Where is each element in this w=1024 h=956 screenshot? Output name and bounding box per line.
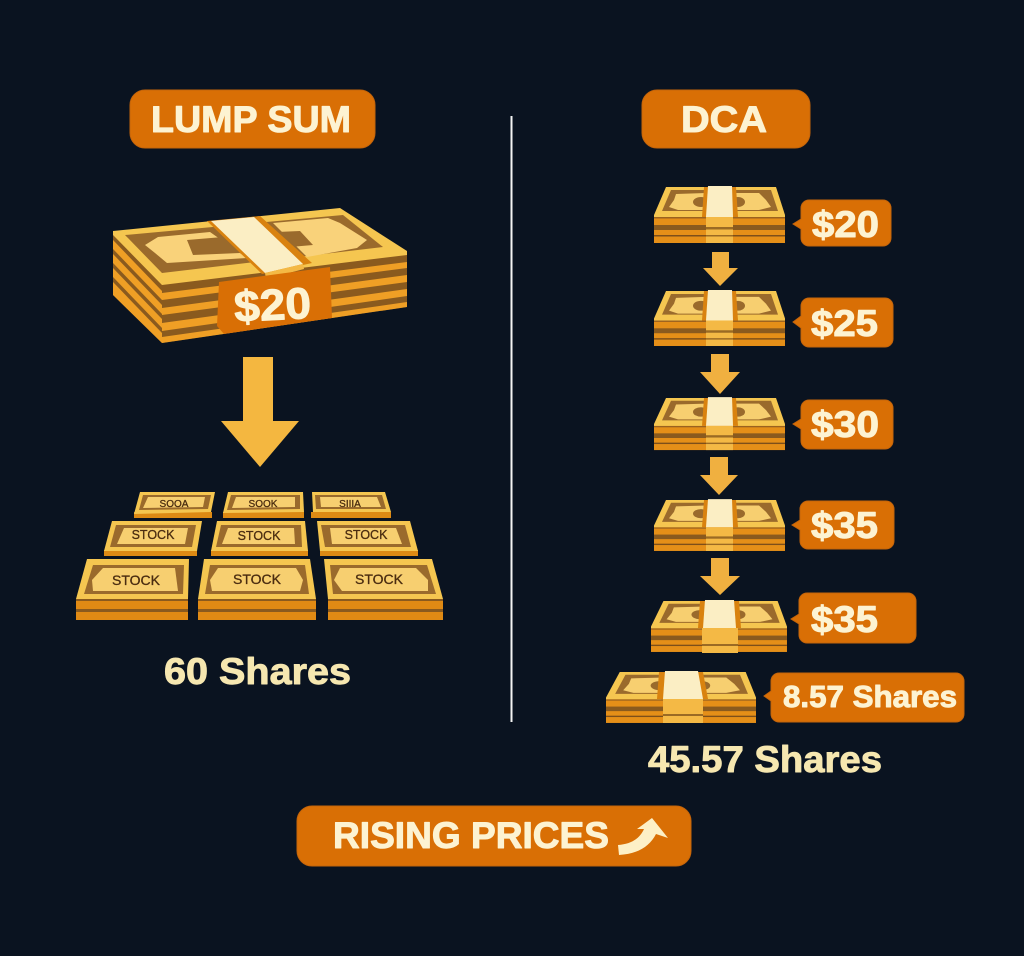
banner: rising prices [297, 806, 691, 866]
stock: front row left [76, 559, 189, 620]
icon: money stack 5 [651, 600, 787, 653]
stock: middle row right: STOCK [345, 528, 388, 542]
callout: $25 [793, 298, 893, 347]
callout: $35: $35 [811, 505, 878, 546]
heading: lump sum [130, 90, 375, 148]
stock: back row right [311, 492, 391, 518]
stock: middle row centre [211, 521, 308, 556]
banner: rising prices: RISING PRICES [333, 815, 609, 856]
stock: middle row left [104, 521, 202, 556]
stock: front row centre [198, 559, 316, 620]
callout: $35 wide: $35 [811, 599, 878, 640]
stock: front row right [324, 559, 443, 620]
stock: middle row right [317, 521, 418, 556]
stock: front row right: STOCK [355, 571, 404, 587]
icon: money stack 6 [606, 671, 756, 723]
heading: DCA: DCA [681, 99, 767, 140]
callout: $35 [792, 501, 894, 549]
callout: $25: $25 [811, 303, 878, 344]
stock: middle row left: STOCK [132, 528, 175, 542]
divider line [510, 116, 512, 722]
callout: $20: $20 [812, 204, 879, 245]
icon: money stack 2 [654, 290, 785, 346]
stock: back row left: SOOA [160, 499, 189, 510]
stock: middle row centre: STOCK [238, 529, 281, 543]
icon: large money stack with $20 label [113, 208, 407, 343]
icon: large money stack with $20 label: $20 [233, 279, 312, 332]
arrow: large down arrow [221, 357, 299, 467]
heading: lump sum: LUMP SUM [151, 99, 351, 140]
callout: $30: $30 [811, 404, 879, 445]
callout: 8.57 shares: 8.57 Shares [783, 679, 957, 714]
icon: money stack 4 [654, 499, 785, 551]
callout: 8.57 shares [764, 673, 964, 722]
arrow: step 1 [703, 252, 738, 286]
callout: $20 [793, 200, 891, 246]
arrow: step 4 [700, 558, 740, 595]
stock: back row right: SIIIA [339, 499, 361, 510]
stock: back row middle: SOOK [249, 499, 278, 510]
text: 60 shares: 60 Shares [164, 651, 351, 692]
icon: rising arrow [618, 818, 668, 855]
callout: $30 [793, 400, 893, 449]
stock: back row left [134, 492, 215, 518]
heading: DCA [642, 90, 810, 148]
icon: money stack 3 [654, 397, 785, 450]
text: 45.57 shares: 45.57 Shares [648, 739, 882, 780]
icon: money stack 1 [654, 186, 785, 243]
stock: front row centre: STOCK [233, 571, 282, 587]
stock: back row middle [223, 492, 304, 518]
stock: front row left: STOCK [112, 572, 161, 588]
arrow: step 3 [700, 457, 738, 495]
arrow: step 2 [700, 354, 740, 394]
grid of stock certificates [76, 492, 443, 620]
callout: $35 wide [791, 593, 916, 643]
